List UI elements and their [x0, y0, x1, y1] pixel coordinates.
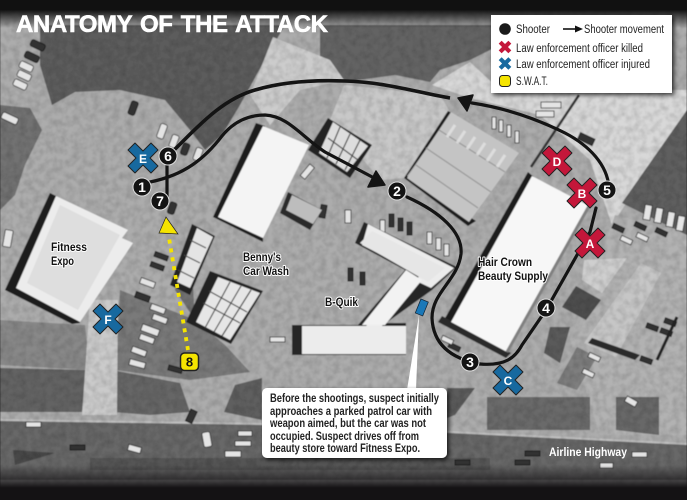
title: ANATOMY OF THE ATTACK — [16, 11, 329, 38]
legend: shooter movement: Shooter movement — [584, 24, 665, 36]
yellow S.W.A.T. route — [159, 217, 188, 350]
Fitness Expo building — [5, 193, 80, 324]
officer markers: B — [578, 187, 587, 201]
shooter position markers — [133, 147, 616, 371]
lower left lots — [0, 320, 90, 370]
legend: shooter movement — [563, 24, 665, 36]
road — [0, 420, 687, 480]
legend: officer killed: Law enforcement officer killed — [516, 43, 643, 55]
shooter position markers: 7 — [156, 193, 164, 209]
shooter position markers: 2 — [393, 183, 401, 199]
upper warehouse — [404, 111, 476, 226]
location labels: Beauty Supply — [478, 271, 549, 283]
legend: S.W.A.T. — [500, 76, 548, 88]
shooter movement paths — [150, 81, 609, 364]
location labels: Expo — [51, 256, 74, 268]
grass strips — [0, 368, 88, 412]
light sand lot — [432, 62, 687, 225]
bottom fade — [0, 465, 687, 500]
small building — [280, 192, 322, 230]
callout: approaches a parked patrol car with — [270, 406, 432, 418]
legend: shooter: Shooter — [516, 24, 550, 36]
B-Quik building — [292, 222, 457, 355]
car wash lower grid — [186, 271, 263, 344]
arrowhead — [458, 95, 473, 111]
callout — [262, 388, 447, 458]
Hair Crown building — [444, 172, 535, 326]
shooter position markers: 4 — [542, 300, 550, 316]
S.W.A.T. marker 8: 8 — [186, 354, 193, 370]
officer markers: E — [139, 152, 147, 166]
legend: officer injured — [499, 57, 650, 71]
Benny's Car Wash building — [213, 123, 265, 242]
callout: weapon aimed, but the car was not — [269, 418, 426, 430]
callout: Before the shootings, suspect initially — [270, 393, 439, 405]
vegetation: upper left — [40, 25, 285, 150]
legend: S.W.A.T.: S.W.A.T. — [516, 76, 548, 88]
legend: officer killed — [499, 41, 643, 55]
location labels: Car Wash — [243, 266, 289, 278]
officer markers: C — [504, 374, 513, 388]
vegetation: upper centre — [320, 25, 500, 82]
officer markers: A — [586, 237, 595, 251]
location labels: Hair Crown — [478, 257, 532, 269]
narrow canopy — [170, 224, 215, 295]
legend: shooter — [499, 23, 550, 36]
officer markers: D — [553, 155, 562, 169]
legend: officer injured: Law enforcement officer injured — [516, 59, 650, 71]
shooter position markers: 5 — [603, 182, 611, 198]
right parking lots — [570, 215, 687, 435]
location labels: Fitness — [51, 242, 87, 254]
location labels: Airline Highway — [549, 447, 628, 459]
S.W.A.T. marker 8 — [180, 353, 198, 370]
callout: beauty store toward Fitness Expo. — [270, 443, 420, 455]
shooter position markers: 6 — [164, 148, 172, 164]
long light roof — [584, 263, 661, 357]
legend — [491, 15, 672, 93]
vegetation: right — [622, 110, 687, 235]
location labels: B-Quik — [325, 297, 359, 309]
officer markers — [93, 143, 605, 395]
location labels: Benny's — [243, 252, 281, 264]
callout: occupied. Suspect drives off from — [270, 431, 419, 443]
top fade — [0, 0, 687, 28]
location labels — [51, 242, 628, 459]
shooter position markers: 1 — [138, 179, 146, 195]
shooter position markers: 3 — [466, 354, 474, 370]
officer markers: F — [104, 313, 112, 327]
canopy grid — [308, 118, 372, 178]
arrowhead — [368, 171, 385, 187]
blue patrol car and callout pointer — [407, 299, 428, 390]
